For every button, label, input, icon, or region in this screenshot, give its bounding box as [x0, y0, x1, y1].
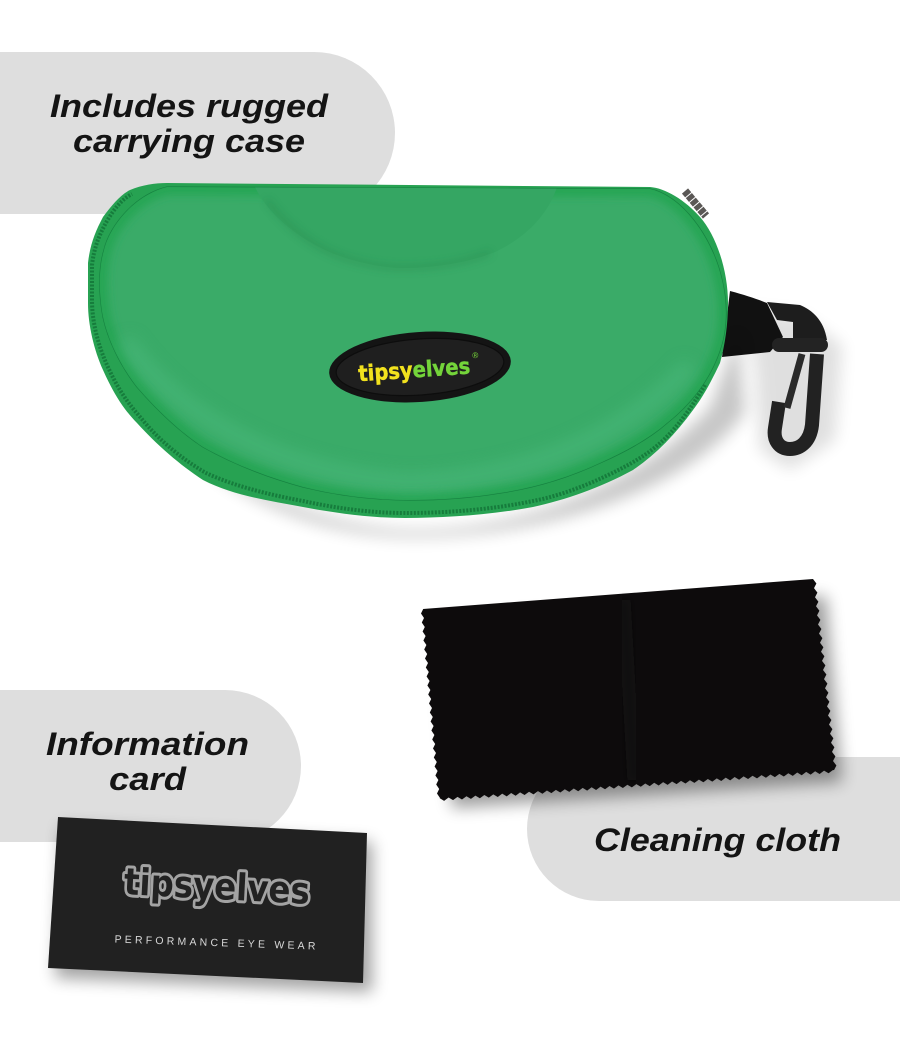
heading: information card: Information	[46, 726, 249, 762]
product: cleaning cloth	[421, 579, 842, 808]
logo badge	[327, 326, 513, 408]
heading: cleaning cloth: Cleaning cloth	[594, 822, 841, 858]
heading: includes rugged carrying case: Includes rugged	[50, 88, 330, 124]
heading: includes rugged carrying case: carrying case	[73, 123, 305, 159]
card tagline: PERFORMANCE EYE WEAR	[114, 933, 316, 953]
logo registered mark: ®	[471, 351, 480, 360]
panel: case label pill	[0, 52, 395, 214]
case top depression	[256, 188, 556, 195]
icon: hook clip	[722, 291, 842, 470]
logo wordmark: tipsyelves	[358, 355, 471, 387]
case shadow	[160, 332, 745, 537]
case zipper band	[88, 183, 728, 518]
shell bright rim	[100, 187, 726, 500]
heading: information card: card	[109, 761, 188, 797]
product: green carrying case	[88, 183, 745, 537]
product: information card	[48, 817, 372, 992]
zipper teeth	[92, 194, 705, 513]
case shell	[100, 187, 726, 500]
panel: information card label pill	[0, 690, 301, 842]
shell lower highlight	[125, 340, 690, 482]
panel: cleaning cloth label pill	[527, 757, 900, 901]
card logo: tipsyelves	[123, 860, 311, 913]
icon: zipper pull	[685, 191, 706, 216]
